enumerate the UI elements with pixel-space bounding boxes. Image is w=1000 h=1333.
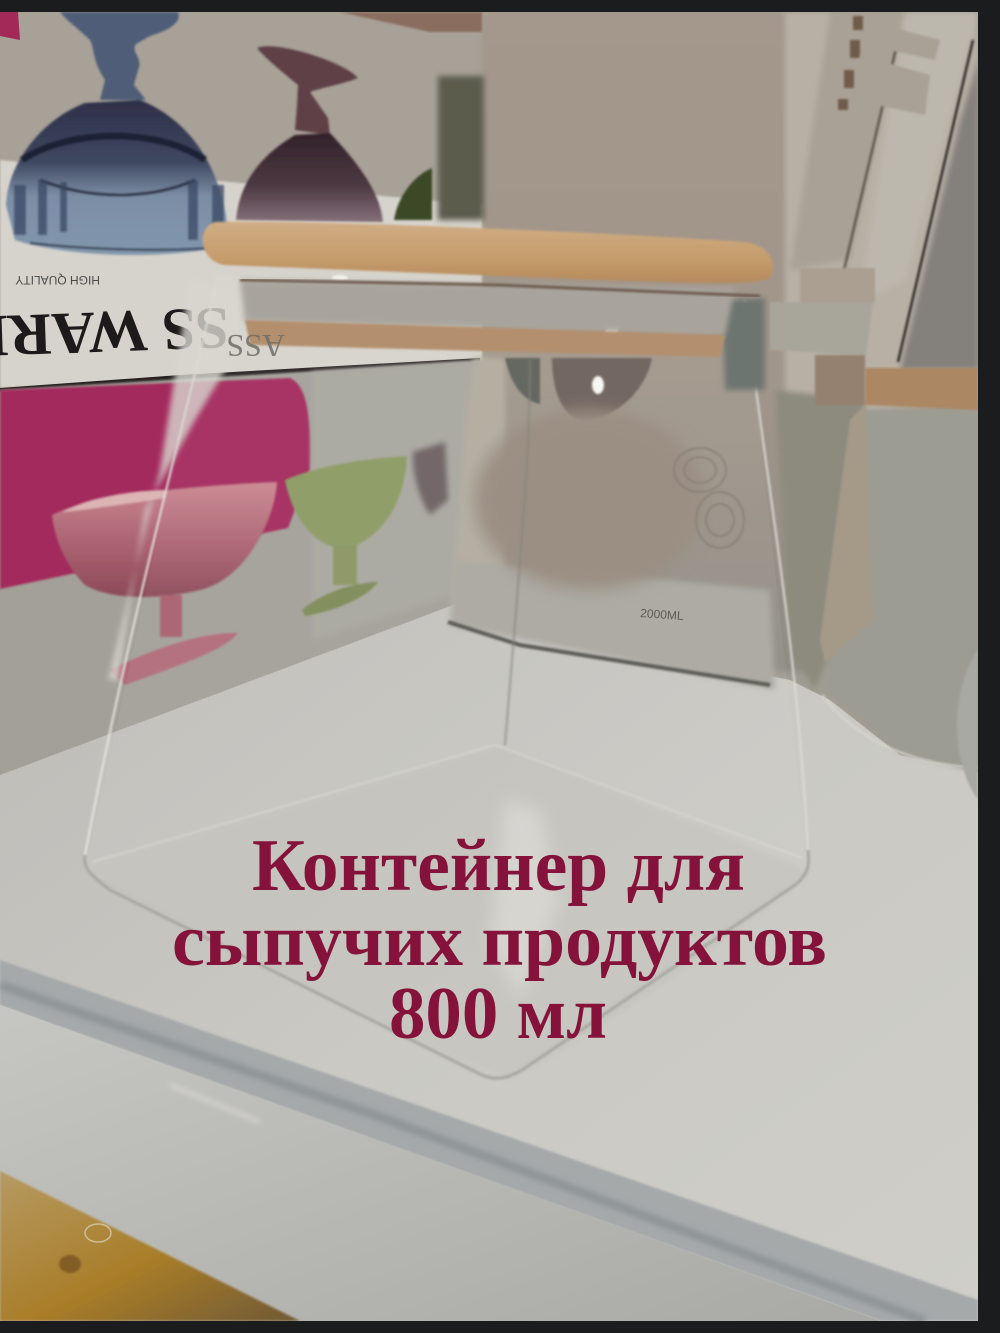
highlight line on the front panel [170,1085,260,1122]
photo base tone [0,12,978,775]
tan paper strip behind the jar [458,356,506,566]
shelf surface [0,595,978,1321]
shelf front edge: blue-grey groove [0,960,978,1321]
dark diagonal lines on packaging [837,40,973,362]
bright glints [332,275,625,394]
upside-down caption: high quality: HIGH QUALITY [15,273,100,287]
background packaging tube [482,12,812,672]
jar outline [85,290,809,1078]
small printed squares on packaging [838,16,940,115]
dark gasket line [240,280,760,296]
round shadow behind the jar [475,410,705,590]
jar grey seal [240,280,735,335]
wooden lid lower part [245,320,725,357]
dark edge of the label band [0,358,480,392]
neighbouring jar: base outline [822,695,978,768]
main glass jar [85,222,809,1078]
neighbouring jar: tan wedge of packaging [820,405,873,662]
neighbouring jar: glass rim [770,268,875,405]
white label band on the box [0,160,482,388]
floral pattern on packaging [674,448,744,548]
shelf front panel [0,1005,880,1321]
dark groove line [0,985,925,1321]
centre glass glare [490,800,560,1000]
icon: green goblet [285,456,407,616]
light packaging strip on the right [785,12,978,420]
icon: faded purple goblet [413,442,448,515]
dark glass column at the top [438,76,484,220]
volume label on carton: 2000ML [640,606,684,623]
title text [172,825,827,1055]
magenta corner at the top [0,12,20,40]
wood knot and drop [59,1224,111,1273]
product box: grey upper side [0,12,490,412]
magenta panel on the box [0,378,310,589]
jar left highlight [108,280,242,680]
jar bottom glass [90,745,808,1078]
title line 1: Контейнер для [252,825,745,907]
grey lower box side [0,359,480,392]
dark lower edge of the carton [448,622,770,685]
title line 3: 800 мл [389,973,607,1055]
grey-blue lighter panel at right of magenta [308,359,470,471]
jar glass body [85,275,808,1078]
icon: green goblet behind [394,168,432,220]
neighbouring jar: wooden lid [865,368,978,410]
icon: purple goblet [236,46,383,222]
dark half circles seen through the jar [505,358,652,420]
icon: blue goblet [6,12,229,255]
wooden lid top [203,222,773,283]
edge of another jar [957,650,978,800]
title line 2: сыпучих продуктов [172,900,827,982]
reflected lettering on the glass: ASS [226,328,285,364]
wooden surface under the shelf [0,1171,300,1321]
icon: pink goblet [52,482,277,685]
pale inner carton at the back [450,560,775,690]
jar shoulder reflection [722,298,765,390]
neighbouring jar: glass body [775,390,978,772]
brown bar at the top of the box [340,12,482,32]
